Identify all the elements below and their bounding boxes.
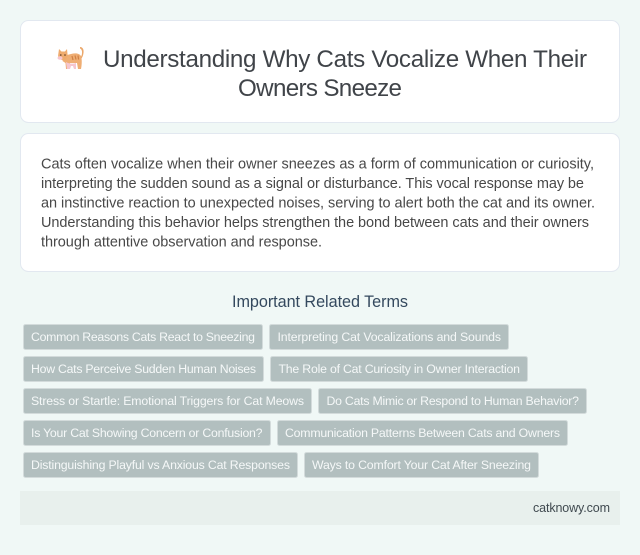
tag: The Role of Cat Curiosity in Owner Interaction <box>278 362 520 376</box>
panel: description <box>20 134 620 272</box>
tag: Communication Patterns Between Cats and Owners <box>285 426 560 440</box>
tag: Common Reasons Cats React to Sneezing <box>31 330 255 344</box>
footer <box>20 491 620 525</box>
tag <box>278 420 568 446</box>
tag: Is Your Cat Showing Concern or Confusion? <box>31 426 263 440</box>
description text <box>41 156 595 250</box>
icon: cat <box>58 47 84 69</box>
panel: title card <box>20 20 620 122</box>
tag <box>24 420 270 446</box>
tag: Do Cats Mimic or Respond to Human Behavior? <box>326 394 579 408</box>
heading: important related terms: Important Related Terms <box>232 293 408 311</box>
description text: Cats often vocalize when their owner sneezes as a form of communication or curiosity, <box>41 156 594 172</box>
tag <box>24 452 298 478</box>
tag <box>270 356 528 382</box>
tag <box>270 324 508 350</box>
description text: through attentive observation and response. <box>41 234 322 250</box>
tag <box>318 388 586 414</box>
footer source text: catknowy.com <box>533 501 610 515</box>
tag: Stress or Startle: Emotional Triggers for Cat Meows <box>31 394 304 408</box>
title text <box>103 46 587 102</box>
title text: Owners Sneeze <box>238 75 402 102</box>
tag list <box>24 324 586 478</box>
tag <box>24 324 262 350</box>
tag: Distinguishing Playful vs Anxious Cat Responses <box>31 458 290 472</box>
tag <box>24 388 312 414</box>
description text: an instinctive reaction to unexpected noises, serving to alert both the cat and its owner. <box>41 196 595 212</box>
tag: Interpreting Cat Vocalizations and Sounds <box>278 330 501 344</box>
tag <box>24 356 264 382</box>
tag: Ways to Comfort Your Cat After Sneezing <box>312 458 531 472</box>
description text: interpreting the sudden sound as a signal or disturbance. This vocal response may be <box>41 176 584 192</box>
tag <box>304 452 538 478</box>
title text: Understanding Why Cats Vocalize When Their <box>103 46 587 73</box>
tag: How Cats Perceive Sudden Human Noises <box>31 362 256 376</box>
description text: Understanding this behavior helps strengthen the bond between cats and their owners <box>41 215 589 231</box>
